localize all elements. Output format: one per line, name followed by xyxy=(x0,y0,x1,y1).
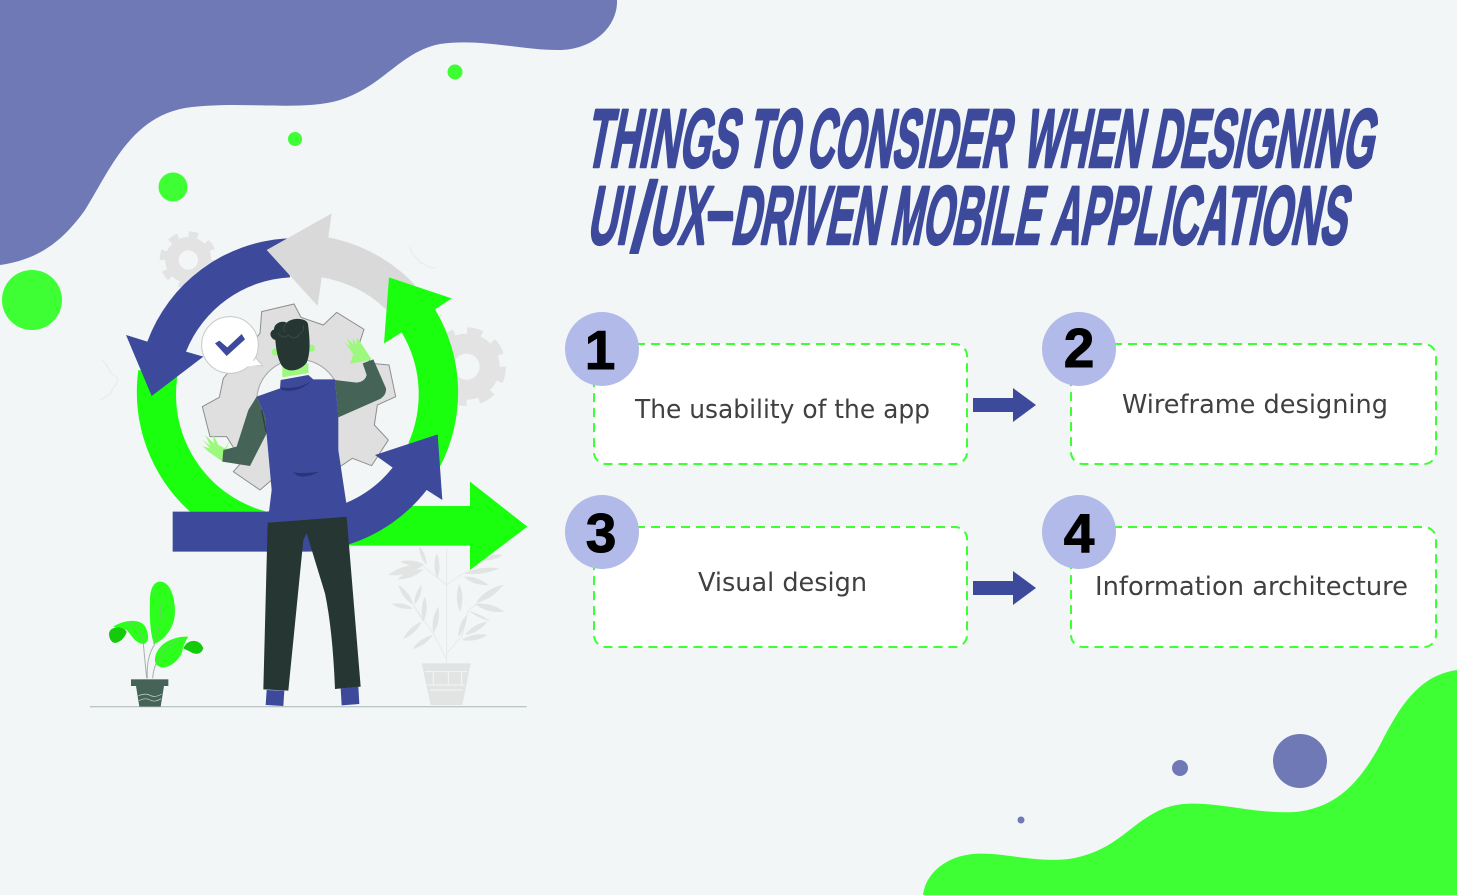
illustration: person with cycle arrows and gear xyxy=(90,213,527,707)
person xyxy=(202,319,386,706)
panel: step 4: Information architecture xyxy=(1095,572,1408,602)
title: THINGS xyxy=(581,92,751,185)
panel: step 3: Visual design xyxy=(698,568,867,598)
title: DRIVEN xyxy=(727,169,894,262)
arrow: blue curved top left xyxy=(126,238,290,396)
title: UI xyxy=(583,169,642,262)
title: WHEN xyxy=(1019,92,1155,185)
title: - xyxy=(706,173,735,247)
collar edge xyxy=(281,373,313,380)
jacket xyxy=(257,375,348,523)
arrow: step 1 to 2 xyxy=(973,388,1036,422)
title: / xyxy=(630,162,658,274)
arrow: blue swoosh from bar xyxy=(173,434,442,552)
ears xyxy=(272,348,279,356)
right hand xyxy=(344,337,372,364)
hair xyxy=(270,319,310,370)
jacket pocket xyxy=(293,472,319,477)
arms xyxy=(222,359,386,466)
ground line xyxy=(90,706,527,707)
title: UX xyxy=(645,169,719,262)
panel: step 1 xyxy=(565,312,967,464)
panel: step 4: 4 xyxy=(1064,502,1095,564)
panel: step 2: Wireframe designing xyxy=(1122,390,1388,420)
arrow: green left ring xyxy=(137,370,267,512)
panel: step 1: The usability of the app xyxy=(634,395,930,425)
icon: large gear xyxy=(202,304,396,490)
panel: step 2: 2 xyxy=(1064,317,1094,379)
icon: small background gear left xyxy=(163,235,213,285)
arrow: grey curved top xyxy=(267,213,415,310)
panel: step 1: 1 xyxy=(585,319,615,381)
gear hole xyxy=(257,359,340,443)
collar shadow xyxy=(281,382,311,391)
panel: step 3: 3 xyxy=(586,502,616,564)
title: CONSIDER xyxy=(802,92,1023,185)
title: MOBILE xyxy=(886,169,1054,262)
neck xyxy=(282,363,308,378)
arrow: step 3 to 4 xyxy=(973,571,1036,605)
left hand xyxy=(202,433,230,462)
icon: speech bubble with check mark xyxy=(202,317,263,373)
arrow: green straight right xyxy=(347,482,527,570)
icon: green potted plant xyxy=(109,582,203,707)
title: TO xyxy=(743,92,812,185)
background blob: bottom right xyxy=(923,670,1457,895)
panel: step 3 xyxy=(565,495,967,647)
icon: background plant xyxy=(388,547,504,705)
title xyxy=(581,92,1387,274)
faint background shapes xyxy=(100,247,437,483)
panel: step 2 xyxy=(1042,312,1436,464)
shoes xyxy=(266,687,359,706)
arrow: green curved right xyxy=(384,277,458,467)
hair curls xyxy=(278,323,304,338)
background blob: top left xyxy=(0,0,617,265)
trousers xyxy=(263,517,361,691)
decorative dots xyxy=(2,64,1327,824)
icon: small background gear right xyxy=(432,332,502,402)
arm fold xyxy=(262,410,266,432)
panel: step 4 xyxy=(1042,495,1436,647)
